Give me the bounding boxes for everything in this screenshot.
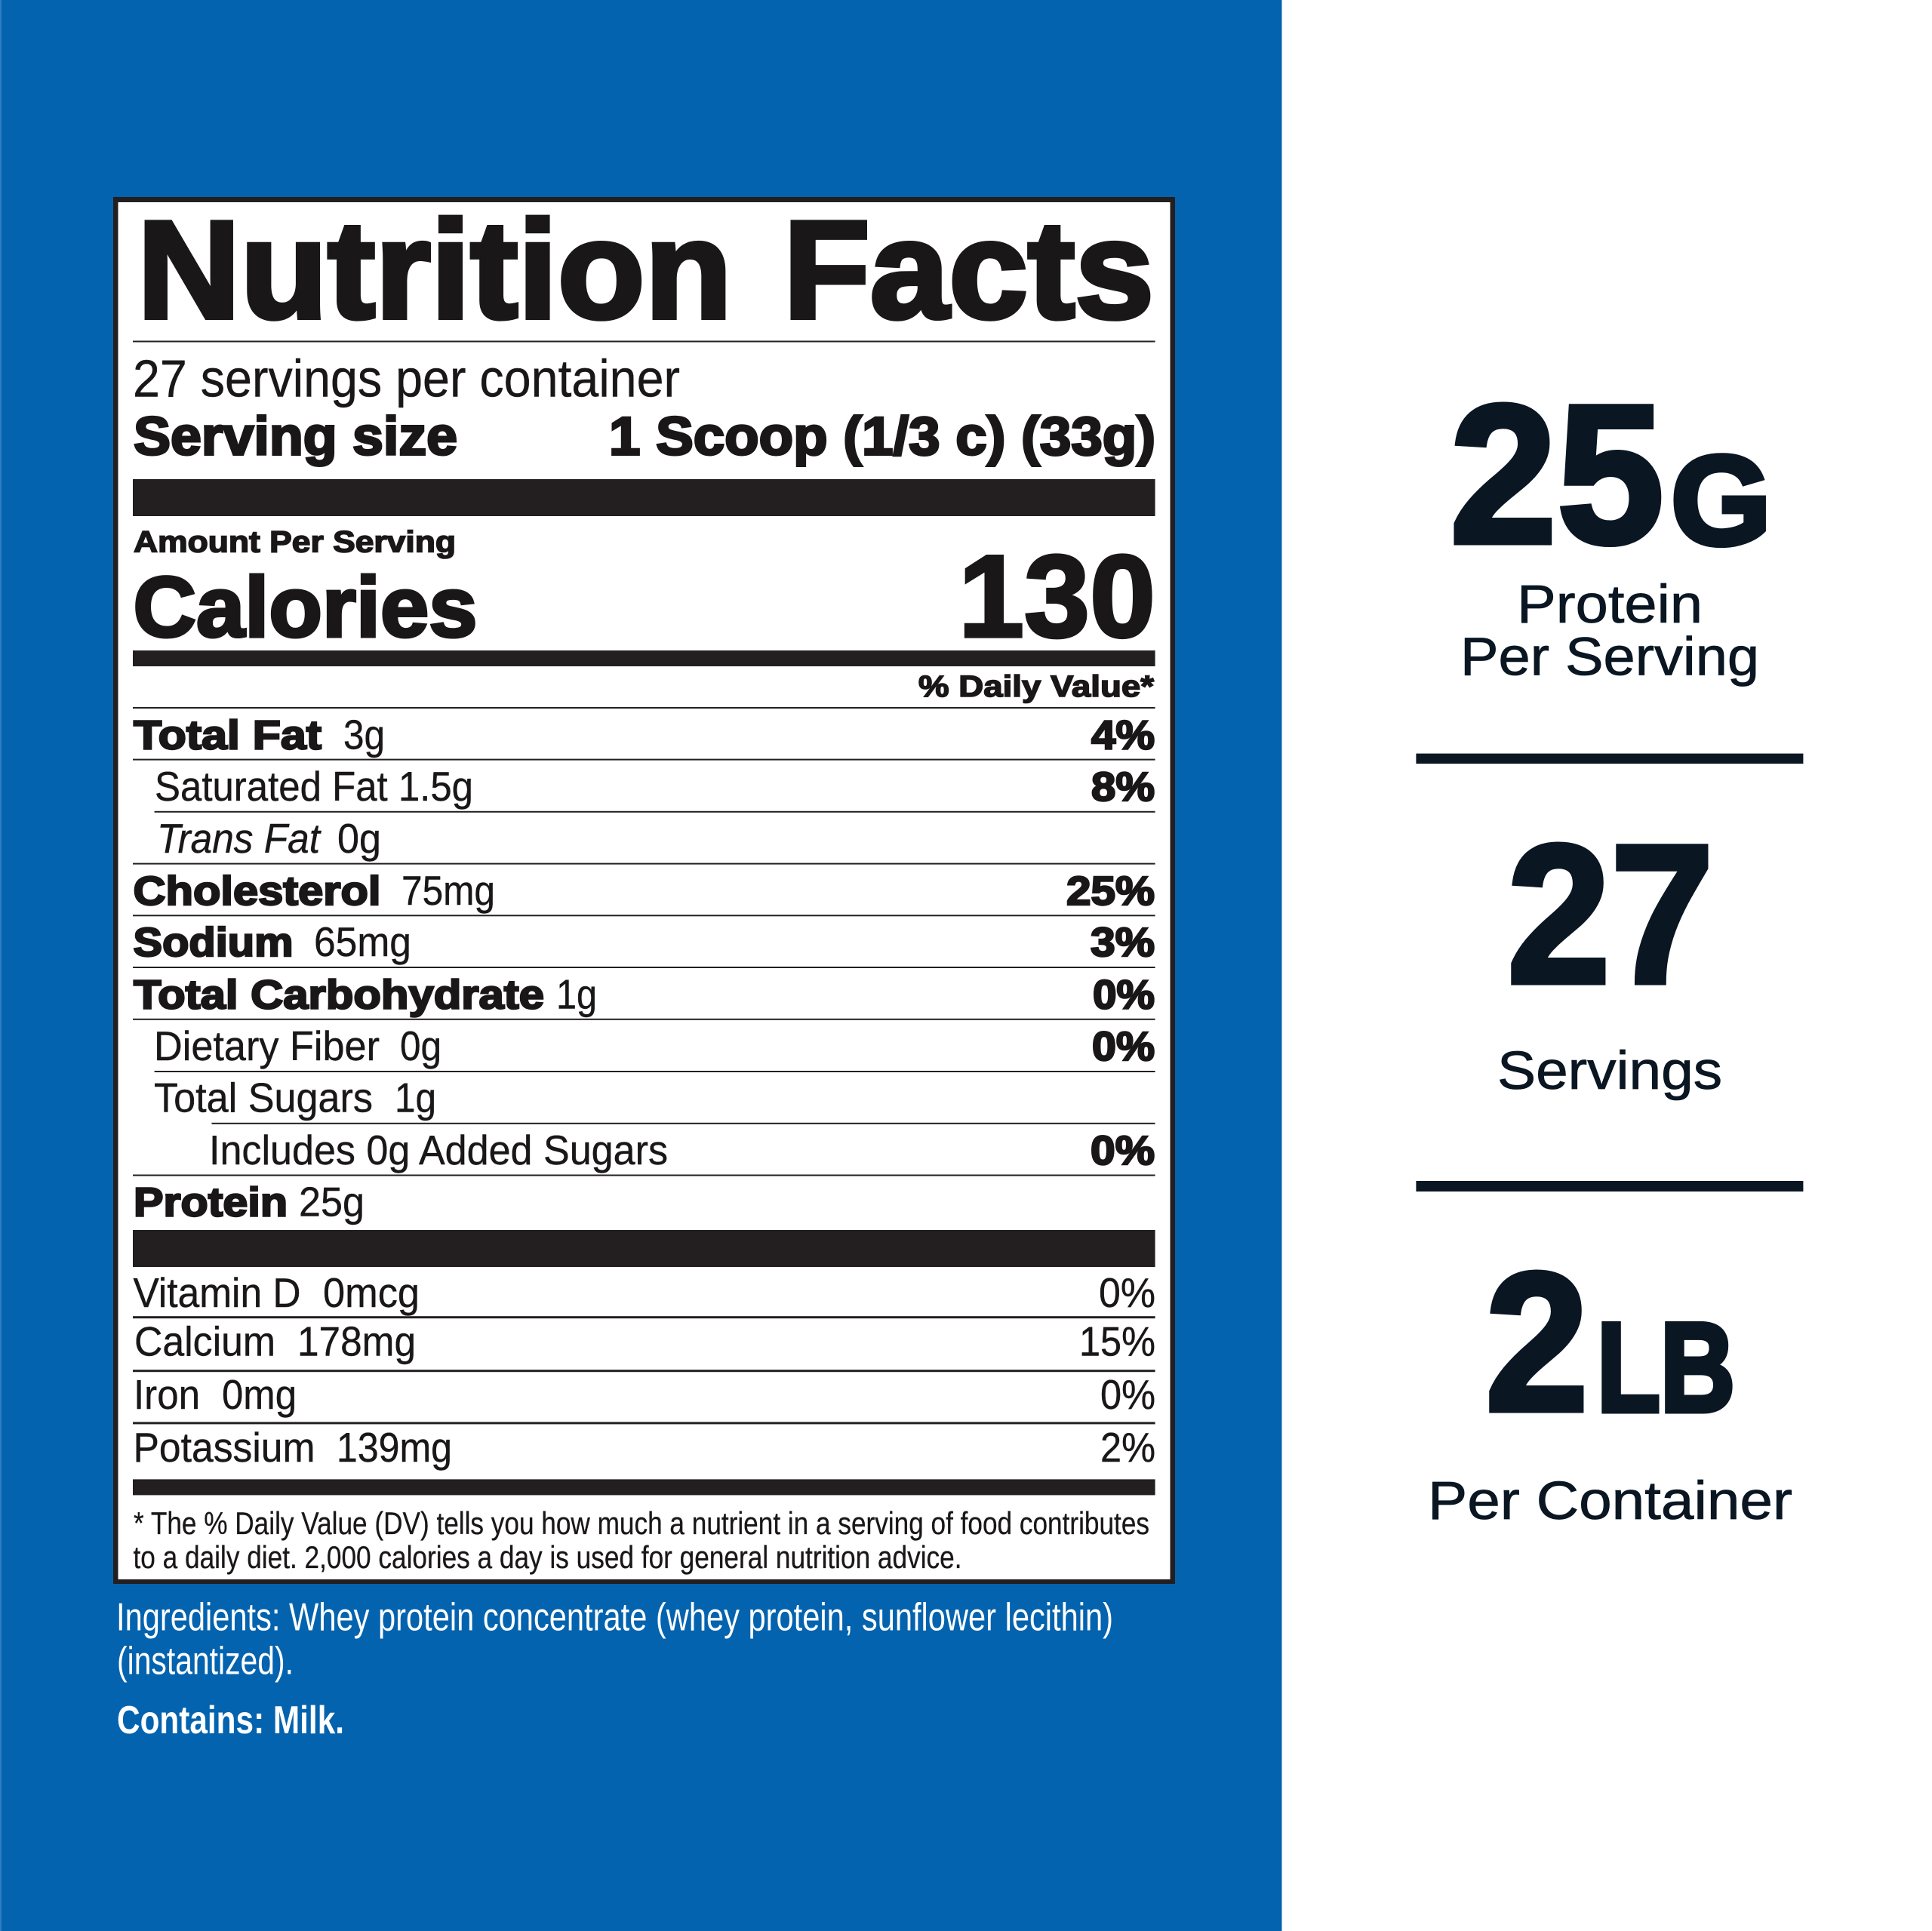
serving size [134, 407, 1155, 466]
row: protein: Protein [134, 1180, 288, 1225]
calories: 130 [958, 531, 1155, 662]
row: calcium: 178mg [297, 1318, 416, 1365]
title: Nutrition [137, 192, 732, 347]
row: cholesterol [133, 867, 1155, 914]
row: calcium: Calcium [134, 1318, 275, 1365]
stat: protein per serving [1450, 364, 1771, 687]
row: added sugars [209, 1127, 1155, 1173]
ingredients: Ingredients: Whey protein concentrate (whey protein, sunflower lecithin) [116, 1595, 1113, 1639]
row: potassium: 139mg [337, 1424, 452, 1471]
row: protein: 25g [299, 1179, 365, 1225]
row: vitamin d: 0% [1099, 1269, 1155, 1316]
row: vitamin d [133, 1269, 1155, 1316]
stat: servings [1497, 804, 1722, 1101]
row: protein [134, 1179, 365, 1225]
serving size: 1 Scoop (1/3 c) (33g) [609, 407, 1155, 466]
row: sodium: 65mg [314, 918, 411, 965]
row: trans fat: Trans Fat [157, 815, 322, 862]
row: iron: Iron [134, 1371, 200, 1418]
footnote [133, 1505, 1149, 1575]
row: calcium: 15% [1079, 1318, 1155, 1365]
row: dietary fiber: 0g [400, 1022, 441, 1069]
row: total carbohydrate: 0% [1093, 972, 1155, 1017]
row: saturated fat: Saturated Fat 1.5g [155, 763, 473, 810]
allergen statement: Contains: Milk. [117, 1699, 344, 1742]
row: calcium [134, 1318, 1155, 1365]
stat: protein per serving: 25 [1450, 364, 1664, 585]
stat: per container: LB [1597, 1296, 1735, 1438]
row: cholesterol: 25% [1066, 869, 1155, 914]
ingredients [116, 1595, 1113, 1683]
row: iron: 0% [1100, 1371, 1155, 1418]
row: iron: 0mg [222, 1371, 297, 1418]
stat: per container: Per Container [1428, 1471, 1792, 1531]
row: dietary fiber [154, 1022, 1155, 1069]
servings per container: 27 servings per container [133, 349, 680, 408]
row: dietary fiber: Dietary Fiber [154, 1022, 380, 1069]
row: total fat [134, 711, 1155, 758]
footnote: * The % Daily Value (DV) tells you how much a nutrient in a serving of food contributes [134, 1505, 1149, 1541]
row: saturated fat: 8% [1091, 764, 1155, 810]
row: potassium: 2% [1100, 1424, 1155, 1471]
row: total fat: 4% [1091, 712, 1155, 758]
ingredients: (instantized). [117, 1639, 294, 1683]
title [137, 192, 1154, 347]
row: sodium: 3% [1091, 920, 1155, 965]
row: total carbohydrate: 1g [556, 970, 597, 1017]
row: cholesterol: Cholesterol [133, 869, 380, 914]
row: vitamin d: Vitamin D [133, 1269, 300, 1316]
row: saturated fat [155, 763, 1155, 810]
row: potassium: Potassium [133, 1424, 315, 1471]
row: total fat: 3g [343, 711, 385, 758]
row: added sugars: Includes 0g Added Sugars [209, 1127, 668, 1173]
stat: servings: Servings [1497, 1041, 1722, 1101]
panel: blue background [0, 0, 1281, 1931]
stat: protein per serving: Per Serving [1460, 627, 1759, 687]
row: dietary fiber: 0% [1092, 1024, 1155, 1069]
row: sodium [133, 918, 1155, 965]
calories [133, 531, 1155, 662]
row: total carbohydrate [134, 970, 1155, 1017]
row: trans fat: 0g [337, 815, 381, 862]
stat: servings: 27 [1507, 804, 1714, 1025]
stat: per container [1428, 1231, 1792, 1531]
row: potassium [133, 1424, 1155, 1471]
stat: per container: 2 [1485, 1231, 1589, 1453]
row: total carbohydrate: Total Carbohydrate [134, 972, 544, 1017]
calories: Calories [133, 560, 477, 655]
row: total sugars: Total Sugars [154, 1075, 373, 1121]
stat: protein per serving: Protein [1517, 575, 1703, 635]
row: added sugars: 0% [1091, 1128, 1155, 1173]
serving size: Serving size [134, 407, 457, 466]
row: total sugars: 1g [395, 1075, 436, 1121]
daily value heading: % Daily Value* [918, 670, 1154, 703]
row: iron [134, 1371, 1155, 1418]
title: Facts [783, 192, 1154, 347]
footnote: to a daily diet. 2,000 calories a day is used for general nutrition advice. [133, 1539, 961, 1575]
row: sodium: Sodium [133, 920, 293, 965]
row: total fat: Total Fat [134, 712, 321, 758]
stat: protein per serving: G [1671, 429, 1771, 571]
row: cholesterol: 75mg [401, 867, 495, 914]
panel: nutrition facts label [113, 192, 1175, 1584]
row: vitamin d: 0mcg [323, 1269, 420, 1316]
amount per serving: Amount Per Serving [134, 525, 456, 558]
